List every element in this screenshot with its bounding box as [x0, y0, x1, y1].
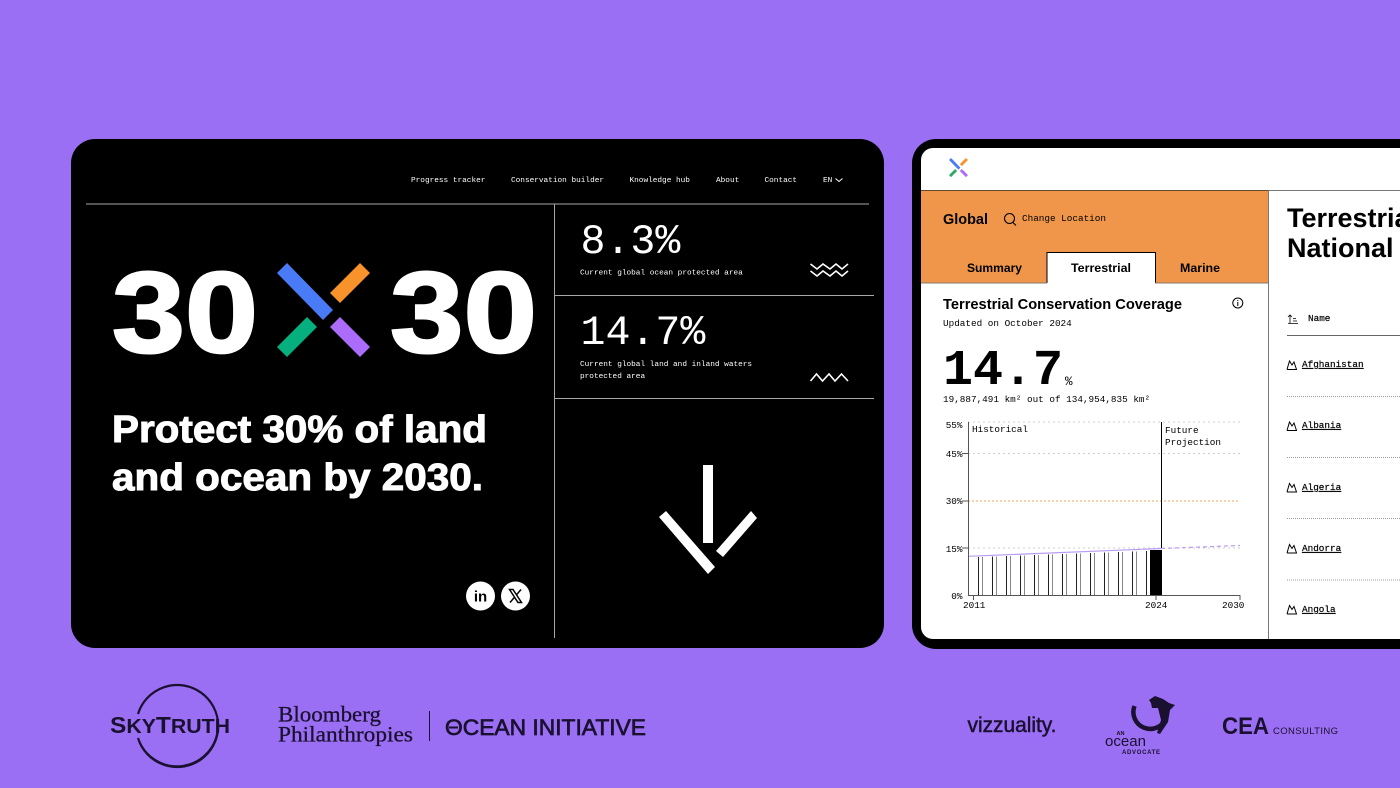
navigation bar: About: [716, 177, 739, 185]
icon: X social: [501, 582, 530, 610]
icon: small X logo: [949, 158, 968, 177]
icon: LinkedIn: [466, 582, 495, 610]
axis labels: 30%: [946, 496, 963, 507]
coverage summary: 19,887,491 km² out of 134,954,835 km²: [943, 394, 1150, 405]
navigation bar: EN: [823, 177, 833, 185]
logo: Ocean Initiative: OCEAN INITIATIVE: [445, 715, 646, 740]
country rows: [1302, 359, 1364, 615]
logo: Bloomberg Philanthropies: Philanthropies: [278, 722, 413, 746]
icon: multicolour X: [277, 263, 370, 357]
axis labels: [946, 420, 1245, 611]
icon: waves: [810, 264, 848, 276]
axis labels: Future: [1165, 425, 1199, 436]
stat: land protected area: 14.7%: [580, 310, 705, 357]
stat: ocean protected area: [580, 219, 848, 278]
country rows: Andorra: [1302, 543, 1342, 554]
navigation bar: Progress tracker: [411, 177, 485, 185]
logo: SkyTruth: [110, 685, 230, 767]
logo: Vizzuality: vizzuality.: [968, 713, 1056, 737]
panel: national table: Name: [1308, 313, 1330, 324]
location header: Global: [943, 212, 988, 228]
navigation bar: [411, 177, 842, 185]
axis labels: 55%: [946, 420, 963, 431]
stat: ocean protected area: 8.3%: [580, 219, 680, 266]
headline: and ocean by 2030.: [112, 457, 483, 499]
logo: Bloomberg Philanthropies: [278, 702, 413, 746]
axis labels: 2011: [963, 600, 986, 611]
icon: LinkedIn: in: [474, 588, 487, 606]
axis labels: 0%: [951, 591, 963, 602]
logo: An Ocean Advocate: ocean: [1105, 733, 1146, 750]
axis labels: Historical: [972, 424, 1028, 435]
headline: Protect 30% of land: [112, 409, 487, 451]
country rows: Algeria: [1302, 482, 1342, 493]
coverage summary: Updated on October 2024: [943, 318, 1072, 329]
tabs: Terrestrial: [1071, 261, 1131, 275]
panel: national table: National: [1287, 233, 1394, 263]
coverage summary: 14.7: [943, 343, 1063, 400]
left 30: 30: [112, 249, 258, 377]
icon: down arrow: [659, 465, 757, 574]
icon: sort: [1288, 315, 1298, 324]
icon: info: [1233, 298, 1243, 308]
right 30: 30: [390, 249, 537, 377]
logo: CEA Consulting: CEA: [1222, 713, 1269, 740]
logo: Bloomberg Philanthropies: Bloomberg: [278, 702, 381, 726]
location header: [921, 190, 1400, 283]
icon: mountains: [810, 374, 848, 381]
logo: CEA Consulting: CONSULTING: [1273, 726, 1338, 737]
coverage summary: %: [1065, 375, 1073, 389]
stat: ocean protected area: Current global ocean protected area: [580, 270, 743, 278]
tabs: Summary: [967, 261, 1022, 275]
icon: whale swirl: [1133, 696, 1175, 734]
chart: terrestrial coverage over time: [946, 420, 1245, 611]
icon: search: [1004, 214, 1016, 226]
stat: land protected area: [580, 310, 848, 381]
stat: land protected area: Current global land and inland waters: [580, 361, 752, 369]
trend line: [968, 546, 1240, 556]
panel: tablet mockup: [912, 139, 1400, 649]
country rows: Angola: [1302, 604, 1336, 615]
logo: An Ocean Advocate: ADVOCATE: [1122, 750, 1160, 756]
panel: 30x30 website hero: [71, 139, 884, 648]
tabs: [921, 252, 1268, 283]
axis labels: 2024: [1145, 600, 1168, 611]
axis labels: 45%: [946, 449, 963, 460]
30x30 logo: [112, 249, 537, 377]
logo: An Ocean Advocate: [1105, 696, 1175, 756]
axis labels: Projection: [1165, 437, 1221, 448]
logo: SkyTruth: SKYTRUTH: [110, 712, 230, 738]
navigation bar: Contact: [764, 177, 797, 185]
navigation bar: Conservation builder: [511, 177, 604, 185]
axis labels: 15%: [946, 544, 963, 555]
icons: mountain markers: [1287, 361, 1296, 614]
navigation bar: Knowledge hub: [630, 177, 690, 185]
axis labels: 2030: [1222, 600, 1245, 611]
headline: [112, 409, 487, 499]
bars: [978, 551, 1146, 595]
tabs: Marine: [1180, 261, 1220, 275]
coverage summary: [943, 296, 1243, 405]
panel: national table: [1287, 203, 1400, 615]
logo: An Ocean Advocate: AN: [1116, 731, 1124, 737]
stat: land protected area: protected area: [580, 373, 645, 381]
logo: CEA Consulting: [1222, 713, 1338, 740]
country rows: Albania: [1302, 420, 1342, 431]
coverage summary: Terrestrial Conservation Coverage: [943, 296, 1182, 313]
axes: [962, 422, 1240, 600]
country rows: Afghanistan: [1302, 359, 1364, 370]
location header: Change Location: [1022, 213, 1106, 224]
